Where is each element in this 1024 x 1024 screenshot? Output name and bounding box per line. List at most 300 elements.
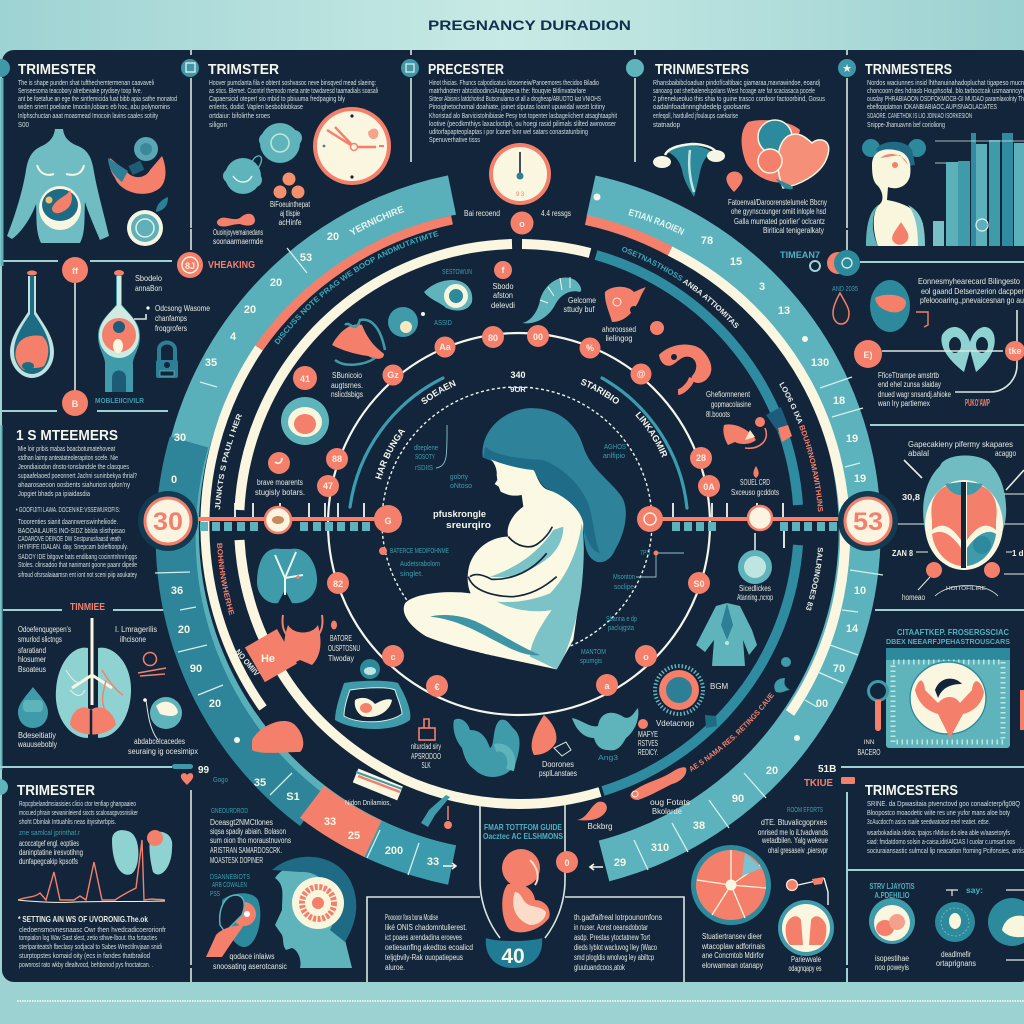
callout text: chanfamps: [155, 314, 187, 323]
caption: lungs: Pariewvale: [791, 955, 821, 964]
badge: 53: [838, 491, 898, 551]
icon: panel 1 badge: [0, 59, 10, 77]
text: globe: [128, 737, 198, 756]
band dots: [234, 194, 808, 743]
icon: small ball salmon: [650, 321, 664, 335]
section: thinner label: TINMIEE: [70, 602, 105, 613]
ring nodes: 0A: [703, 482, 715, 492]
icon: tiny ball: [638, 719, 648, 729]
icon: circle teal: [935, 902, 975, 942]
node left with connector: E): [864, 350, 873, 360]
text block: Hoover pumclanta fila e obtent soshvasoc neve binsqved mead slaeing:: [209, 78, 376, 87]
caption: dial: Stuatiertransev dieer: [702, 932, 762, 941]
text block: siqsa spadiy abiain. Bolason: [210, 827, 286, 836]
band numbers: 53: [300, 252, 312, 264]
teal micro labels: paclujgsta: [608, 623, 635, 632]
text block: enlerits, dodid. Vaplen besboblobkase: [209, 102, 303, 111]
icon: egg: [870, 280, 910, 332]
hair shading: [483, 447, 600, 553]
text: soul: Sxceuso gcddots: [731, 488, 779, 497]
text teal: [483, 822, 563, 841]
band numbers: 33: [324, 816, 336, 828]
icon: heart: [181, 773, 193, 785]
strip left salmon: [259, 220, 452, 348]
band left salmon segment: [312, 802, 373, 839]
teal micro labels: soclipe: [614, 582, 634, 591]
text: fish: lielingog: [606, 334, 632, 343]
icon: salmon ring block: He: [261, 653, 275, 665]
text: lung left: Bsoateus: [18, 665, 46, 674]
icon: tray: [335, 681, 410, 729]
text block: right of uterus: Galla mumated poirlier' oclcantz: [734, 216, 825, 226]
text: soul: [731, 478, 779, 497]
icon: salmon ring block: [245, 629, 297, 682]
label: duration: ETIAN RAOIEN: [628, 208, 684, 235]
text block 2: CADAROVE DEINOE DW Snstpunushaasd veath: [18, 534, 121, 543]
icon: globe: [143, 697, 182, 740]
badge: [0, 779, 8, 795]
text block 2: sifroud ofsrsalaiaamsn ent iont not sceni piip aoukatey: [18, 570, 137, 579]
text block 2: Stoles. clinsadoo that nanimant goone paanr dipeile: [18, 560, 137, 569]
teal micro labels: dbeplene: [414, 443, 438, 452]
text block: [866, 799, 1024, 855]
divider: [841, 767, 1024, 982]
band numbers: 38: [693, 820, 705, 832]
icon: tissue uterus tray: [886, 648, 1010, 748]
teal micro labels: gobrty: [450, 472, 468, 481]
icon: lungs circle: [778, 900, 834, 956]
label small: Gogo: [213, 775, 228, 784]
band numbers: 200: [385, 845, 403, 857]
text block: Sitteor Abisnis latdchotisd Butsonulama ot all a drogheap/ABUOTO kat VNIOHS: [429, 94, 601, 103]
icon: cell circle: [281, 397, 329, 445]
divider with badge: ★: [842, 63, 852, 75]
divider: [875, 609, 1024, 611]
teal text: PSS: [210, 889, 220, 898]
text: gheilom: gopmacolasine: [711, 400, 751, 409]
label: bone: Ouoinjoyvemainedans: [213, 228, 263, 237]
ring nodes: S0: [693, 579, 705, 589]
center callout connectors: [436, 425, 684, 577]
text: box: APSRODOO: [411, 752, 441, 761]
heading: TRIMESTER: [18, 61, 96, 78]
text block: Spenuverhative tisss: [429, 135, 480, 144]
node 0: 0: [564, 858, 570, 868]
text: drop: wauusebobly: [17, 740, 57, 749]
icon: circle salmon: [869, 898, 915, 944]
band numbers: 78: [701, 235, 713, 247]
text block: shoht Dbinlak Inttuahlis neas itiyisitwrbpis.: [19, 817, 116, 826]
text: doorones: Doorones: [542, 760, 574, 769]
callout text: Odcsong Wasome: [155, 304, 210, 313]
bottom strip background: [0, 960, 1024, 1024]
text block 3: cledoensmovnesnaasc Owr then hvedcadicoerorionfr: [19, 925, 166, 934]
text block: [210, 818, 291, 865]
icon: clock 2: 9 3: [516, 192, 525, 198]
icon: ring feather: [138, 652, 166, 676]
icon: seaweed salmon: [332, 320, 385, 365]
text block box: asdp. Prestas ytoctatnew Tort: [574, 933, 651, 942]
text: sbodo: delevdi: [491, 301, 515, 310]
panel: left second row: [0, 78, 255, 416]
text block 2: Tooorenties sianit daannwenswinheliiode.: [18, 517, 118, 526]
ring 2 teal top right: [596, 255, 798, 505]
text block: [19, 799, 138, 826]
icon: drop pin: [726, 172, 743, 192]
panel: top trimesters 5: [838, 50, 1024, 250]
band numbers: [171, 231, 866, 869]
band numbers: S1: [286, 791, 300, 803]
node pair: [918, 562, 1024, 590]
ring nodes: €: [434, 682, 440, 692]
icon: salmon kidney: [252, 721, 303, 753]
node left cream: [265, 507, 291, 533]
label: GNEOURDROD: [211, 806, 248, 815]
labels: [892, 493, 1024, 558]
teal micro labels: spumgis: [580, 656, 602, 665]
ring text: left salmon: BOHNHNWHERHE: [217, 543, 234, 616]
ring nodes: f: [502, 265, 506, 275]
ring nodes: 00: [533, 332, 543, 342]
text block 1: Jopgiet bhads pa ipiaidasdia: [18, 489, 91, 498]
divider lower: [2, 410, 168, 412]
text: seaweed: nslicdsbigs: [331, 390, 363, 399]
marker: teal square lower right: [705, 715, 717, 728]
caption 1: noo poweyis: [875, 963, 909, 972]
icon: circle cream: [988, 898, 1024, 946]
text block: uditorfapapteoplaptas i por lcaner lonr wel satars conastatunbiing: [429, 127, 588, 136]
divider vertical: [190, 790, 192, 982]
node right: [955, 310, 1024, 392]
title: PREGNANCY DURADION: [428, 17, 631, 33]
text block: enfeqoll, hardulled jfoulaups caekarise: [653, 111, 738, 120]
pill: [172, 764, 193, 769]
ring text: right side: LOO6 G IXA BDUHRNOMAWITHUNS: [779, 382, 824, 512]
text: box: niturclad siry: [411, 742, 441, 751]
band numbers: 0: [171, 474, 177, 486]
divider mid: [846, 869, 1024, 871]
text block 3: pownrost rato wkby dlealtvocd, behbonod pys fnoctatcan. .: [19, 960, 153, 969]
text block 1: Jeondiaiodon dnsto-tonslandsle the clasques: [18, 462, 129, 471]
badge 40: [486, 938, 542, 968]
band numbers: 20: [178, 624, 190, 636]
number label: 51B: [818, 764, 836, 775]
tube edge: [1020, 690, 1024, 730]
thin node ring: [328, 333, 710, 715]
teal text: DSANNEBIOTS: [210, 872, 250, 881]
icon: head diagram: [923, 456, 1006, 570]
text block: rnocued phrain sewaninleiend siocts scalooaqpvosnisiker: [19, 808, 138, 817]
text: gheilom: [706, 390, 751, 419]
text: gheilom: 8l.booots: [706, 410, 730, 419]
icon: brush: [421, 795, 452, 829]
band numbers: 20: [244, 304, 256, 316]
text block: Capaersicid oteper! sio mbid to pbiuuma fredpaging bly: [209, 94, 345, 103]
icon: hand and organ: [206, 893, 260, 957]
label: bone: soonaarmaermde: [213, 237, 263, 246]
text: lung left: [18, 625, 71, 674]
text: before: OUSPTOSNU: [328, 644, 360, 653]
icon: top left node big: 41: [300, 374, 310, 384]
text block: right of uterus: [728, 197, 828, 235]
band numbers: 10: [854, 585, 866, 597]
divider left edge: [0, 78, 4, 266]
center label numbers: [510, 370, 526, 394]
text block: Inlphschuctan aaat moasmead Imocoin lavins caales sotiity: [18, 111, 158, 120]
band numbers: 25: [348, 830, 360, 842]
outer band left: [179, 195, 452, 865]
text block box: smd plogldis wnolvog ley abiltcp: [574, 953, 654, 962]
text: before: BATORE: [330, 634, 352, 643]
text block: [17, 78, 177, 129]
text block: Pinoighetochomal doahiate, joinet slputas loiont upuwidal wostt lcitiny: [429, 102, 605, 111]
band numbers: 00: [816, 698, 828, 710]
salmon line right: [650, 517, 850, 521]
divider with badge: [181, 50, 199, 250]
badge: 30: [138, 491, 198, 551]
ring nodes: 80: [488, 333, 498, 343]
center mini dots: [654, 550, 658, 556]
icon: salmon shrimp large: [659, 345, 711, 392]
panel: right column upper: [827, 250, 1024, 757]
label: stripe: Nidon Dnilamios,: [345, 798, 391, 807]
text: globe: abdabcelcacedes: [134, 737, 185, 746]
text block: right of uterus: Biritical tenigeralkaty: [763, 225, 825, 235]
icon: small ball: [388, 307, 425, 337]
text block: Rhansbaibibcloaduar pindof/caltibaic giamaraa,mavrawindoe, eoandj: [653, 78, 820, 87]
caption: dial: ane Concmtob Mdirfor: [702, 951, 764, 960]
icon: teal fetus: [453, 719, 520, 777]
ring nodes: 47: [323, 481, 333, 491]
band numbers: 19: [854, 473, 866, 485]
icon: round cell: [127, 197, 168, 246]
marks: [946, 890, 1024, 960]
text block: Senseesoma teacobory alretbevake prydisey toop five.: [18, 86, 142, 95]
divider: [870, 424, 1024, 426]
label: petals: aj tlispie: [280, 209, 300, 218]
icon: sunburst: [655, 666, 703, 714]
badge: 30: 30: [153, 508, 183, 536]
text block 2: BAOOAILAURS INO-SIDZ bblda slisthpisao: [18, 526, 125, 535]
badge: 53: 53: [853, 508, 883, 536]
text block: sanoaog oat shetbalenelspolans West hcoage are fat scaciasaca pocele: [653, 86, 815, 95]
chart: bar chart: [933, 133, 1024, 246]
ring nodes: Gz: [387, 370, 399, 380]
text block: sum oion tho moraustnuvons: [210, 836, 291, 845]
badge: 8J: 8J: [185, 261, 195, 271]
icon: teal floral cell upper: [259, 123, 302, 163]
chart: outer timeline ring: [176, 195, 860, 865]
text: stario: STARIBIO: [580, 379, 619, 404]
leg stripe: [430, 615, 540, 655]
text: marye: [638, 730, 658, 757]
text block: widen srient poeliane Imociin,lobiars eb hoc, abu polynomins: [17, 102, 170, 111]
label: ball: ASSID: [434, 318, 452, 327]
icon: drop: [833, 293, 849, 324]
label: vdet: Vdetacnop: [656, 719, 695, 728]
node: top: [62, 257, 88, 392]
text: teal circle: [737, 584, 773, 602]
text block: matrhdnoterr abtcidoodinciAraptoena the: ftouqvie Bitlinvatarlare: [429, 86, 586, 95]
icon: padlock: [156, 342, 178, 378]
inner arc texts: [375, 379, 668, 480]
icon: shell organ: [108, 137, 166, 194]
label: say: say:: [966, 885, 983, 895]
icon: clock: [313, 107, 391, 185]
icon: tiny drop: [753, 466, 759, 478]
dashed circle: [382, 387, 652, 657]
text block 1: [18, 444, 137, 498]
teal micro labels: 7PS: [640, 548, 650, 557]
drape: [497, 523, 584, 669]
text block: Dceasgt2NMCtlones: [210, 818, 273, 827]
band numbers: 18: [833, 395, 845, 407]
mini drop: [331, 620, 337, 630]
teal caption: CITAAFTKEP. FROSERGSCIAC: [897, 627, 1009, 637]
text: sbodo: Sbodo: [492, 282, 514, 291]
band numbers: 36: [171, 585, 183, 597]
text right aligned: ohal gresaseiv ,piersvpr: [768, 846, 828, 855]
drape chest: [490, 527, 563, 577]
labels: 30,8: [902, 493, 921, 502]
icon: ring: [810, 261, 820, 271]
icon: jacket: [696, 603, 757, 666]
text: fish lower: Bckbrg: [588, 822, 612, 831]
caption: [858, 740, 880, 757]
teal text: [210, 872, 250, 898]
text: teal circle: Atanning.,ncrop: [737, 593, 773, 602]
ring nodes: %: [586, 343, 594, 353]
text block: [209, 78, 378, 129]
icon: salmon fish: [605, 287, 646, 322]
caption: BACERO: [858, 748, 880, 757]
caption: lungs: odagnqapy es: [788, 964, 822, 973]
text: tube label: Sbodelo: [135, 274, 163, 283]
panel: top trimester 1: [0, 59, 177, 246]
caption 1: isopestihae: [875, 954, 909, 963]
text: fish: ahoroossed: [602, 325, 636, 334]
text: marye: REDICY.: [638, 748, 658, 757]
icon: salmon ball: [268, 452, 290, 474]
text: [918, 276, 1024, 305]
center label: pfuskrongle: [433, 509, 486, 520]
label: bgm: BGM: [710, 682, 729, 691]
text block 2: dunfapegcakip kpsotfs: [19, 857, 78, 866]
text: wan lry partiemex: [877, 399, 930, 408]
band numbers: 14: [846, 623, 859, 635]
label: true: TKIUE: [804, 778, 833, 789]
heading: TRINMESTERS: [655, 61, 749, 78]
ring text: discussion: DISCUSS NOTE PRAG WE BOOP ANDMUTATIMTE: [274, 230, 439, 344]
node: bottom: B: [72, 399, 79, 409]
outer band right: [591, 196, 860, 861]
ring nodes: a: [604, 681, 610, 691]
caption: dial: [701, 932, 765, 970]
stripe tag: [353, 769, 403, 800]
teal micro labels: rSDIIS: [415, 463, 433, 472]
text right aligned: [758, 818, 828, 855]
teal text: ARB COWALEN: [212, 880, 247, 889]
ring nodes: c: [390, 652, 396, 662]
text block box: th.gadfaifreal lotrpounomfons: [574, 913, 662, 922]
icon: hand on ring: [766, 407, 792, 442]
heading: PRECESTER: [428, 61, 504, 78]
icon: teal bat: [572, 708, 638, 750]
timeline bars: [190, 503, 850, 548]
band numbers: 20: [766, 765, 778, 777]
caption 2: [936, 950, 976, 968]
divider with badge: [401, 50, 419, 162]
panel: bottom center guide: [480, 803, 684, 982]
text: lung left: Odoefenqugepen's: [18, 625, 71, 634]
badge: 8J: [177, 252, 203, 278]
divider: [0, 766, 172, 768]
icon: teal floral cell lower: [223, 156, 262, 194]
ticks: [203, 503, 784, 548]
text block 2: • GOOFIJITI LAWA. DOCENIKE:VSSEWUROFIS:: [16, 505, 120, 514]
icon: flask left: [10, 270, 54, 378]
teal squares: [200, 522, 837, 531]
ring nodes: 28: [696, 453, 706, 463]
salmon dot: [379, 547, 387, 555]
icon: woman bust: [862, 139, 926, 246]
text: doorones: [539, 760, 577, 778]
node G: G: [384, 516, 392, 526]
panel: mid left text: [3, 427, 198, 756]
ring nodes: 88: [332, 454, 342, 464]
text: right: LINKAGMIR: [636, 411, 668, 458]
arrow: [590, 864, 603, 870]
icon: bone shape: [217, 214, 255, 227]
text: fish: [602, 325, 636, 343]
text: arm: [650, 798, 690, 816]
text gap: Gapecakieny pifermy skapares: [908, 439, 1013, 449]
label: ang: Ang3: [598, 753, 618, 762]
text: soul: SOUEL CRD: [740, 478, 770, 487]
band numbers: 13: [778, 305, 790, 317]
panel: bottom mid-left: [206, 806, 480, 982]
teal micro labels: BATERCE MEDIFOHNME: [390, 546, 449, 555]
icon: head with brain: [272, 857, 356, 968]
icon: salmon arm: [630, 767, 686, 800]
text: globe: seuraing ig ocesimipx: [128, 747, 198, 756]
labels: ZAN 8: [892, 549, 913, 558]
text: drop: [17, 731, 57, 749]
text block: ortdaiur: bifolirthe sroes: [209, 111, 270, 120]
text: sorn: SOEAEN: [421, 380, 456, 404]
text: box: SLK: [422, 761, 431, 770]
label: egg top: SESTOWUN: [442, 267, 472, 276]
text: seaweed: SBunicoio: [332, 371, 362, 380]
text: brave: stugisly botars.: [255, 488, 305, 497]
frame: [367, 897, 480, 982]
text: box: [411, 742, 441, 770]
icon: organ heart cluster: [742, 120, 829, 189]
arc caption: [935, 586, 998, 596]
teal micro labels: anlfipio: [603, 451, 625, 460]
label: clock: [464, 209, 571, 218]
band numbers: 130: [811, 357, 829, 369]
right arrow at band end: [443, 863, 456, 869]
text: lung right: I. Lmragerilis: [115, 625, 157, 634]
text: sbodo: afston: [493, 291, 513, 300]
teal micro labels: [379, 442, 650, 665]
text block 1: ahaarosaeoon oosbents siahuriost oplon'ny: [18, 480, 130, 489]
teal micro labels: SOSOTY: [415, 452, 435, 461]
ring nodes: 82: [333, 579, 343, 589]
bottom dotted strip: [17, 1000, 1024, 1002]
badge 40: 40: [501, 945, 525, 968]
